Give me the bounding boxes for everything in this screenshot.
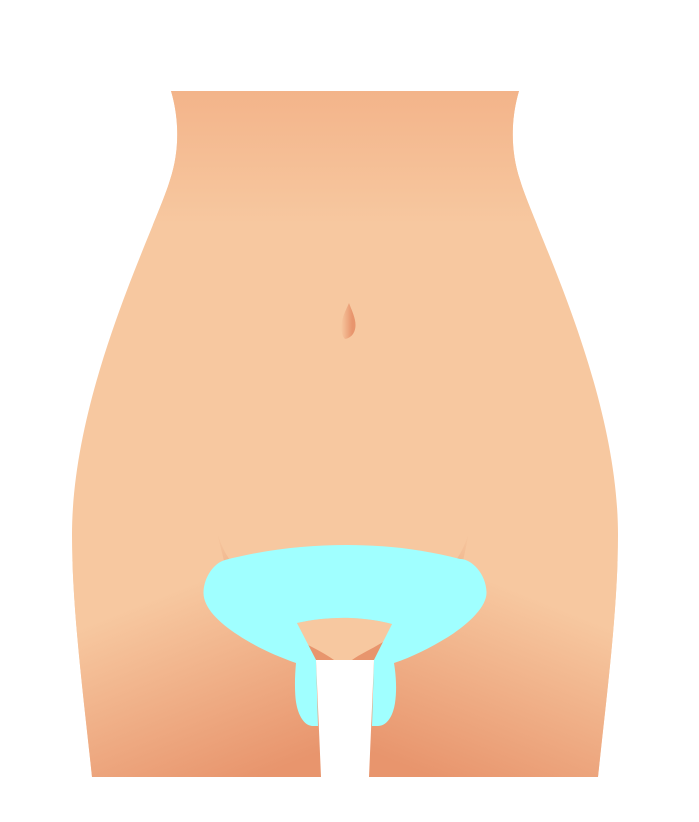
inner skin area xyxy=(297,618,392,662)
central white strip xyxy=(316,660,374,777)
navel xyxy=(341,303,356,339)
right hip crease xyxy=(456,532,469,561)
illustration: lower torso xyxy=(72,91,618,777)
torso body xyxy=(60,91,630,777)
left shadow xyxy=(308,645,334,660)
underwear: cyan garment xyxy=(203,545,487,726)
left hip crease xyxy=(217,532,230,561)
right shadow xyxy=(352,642,383,660)
